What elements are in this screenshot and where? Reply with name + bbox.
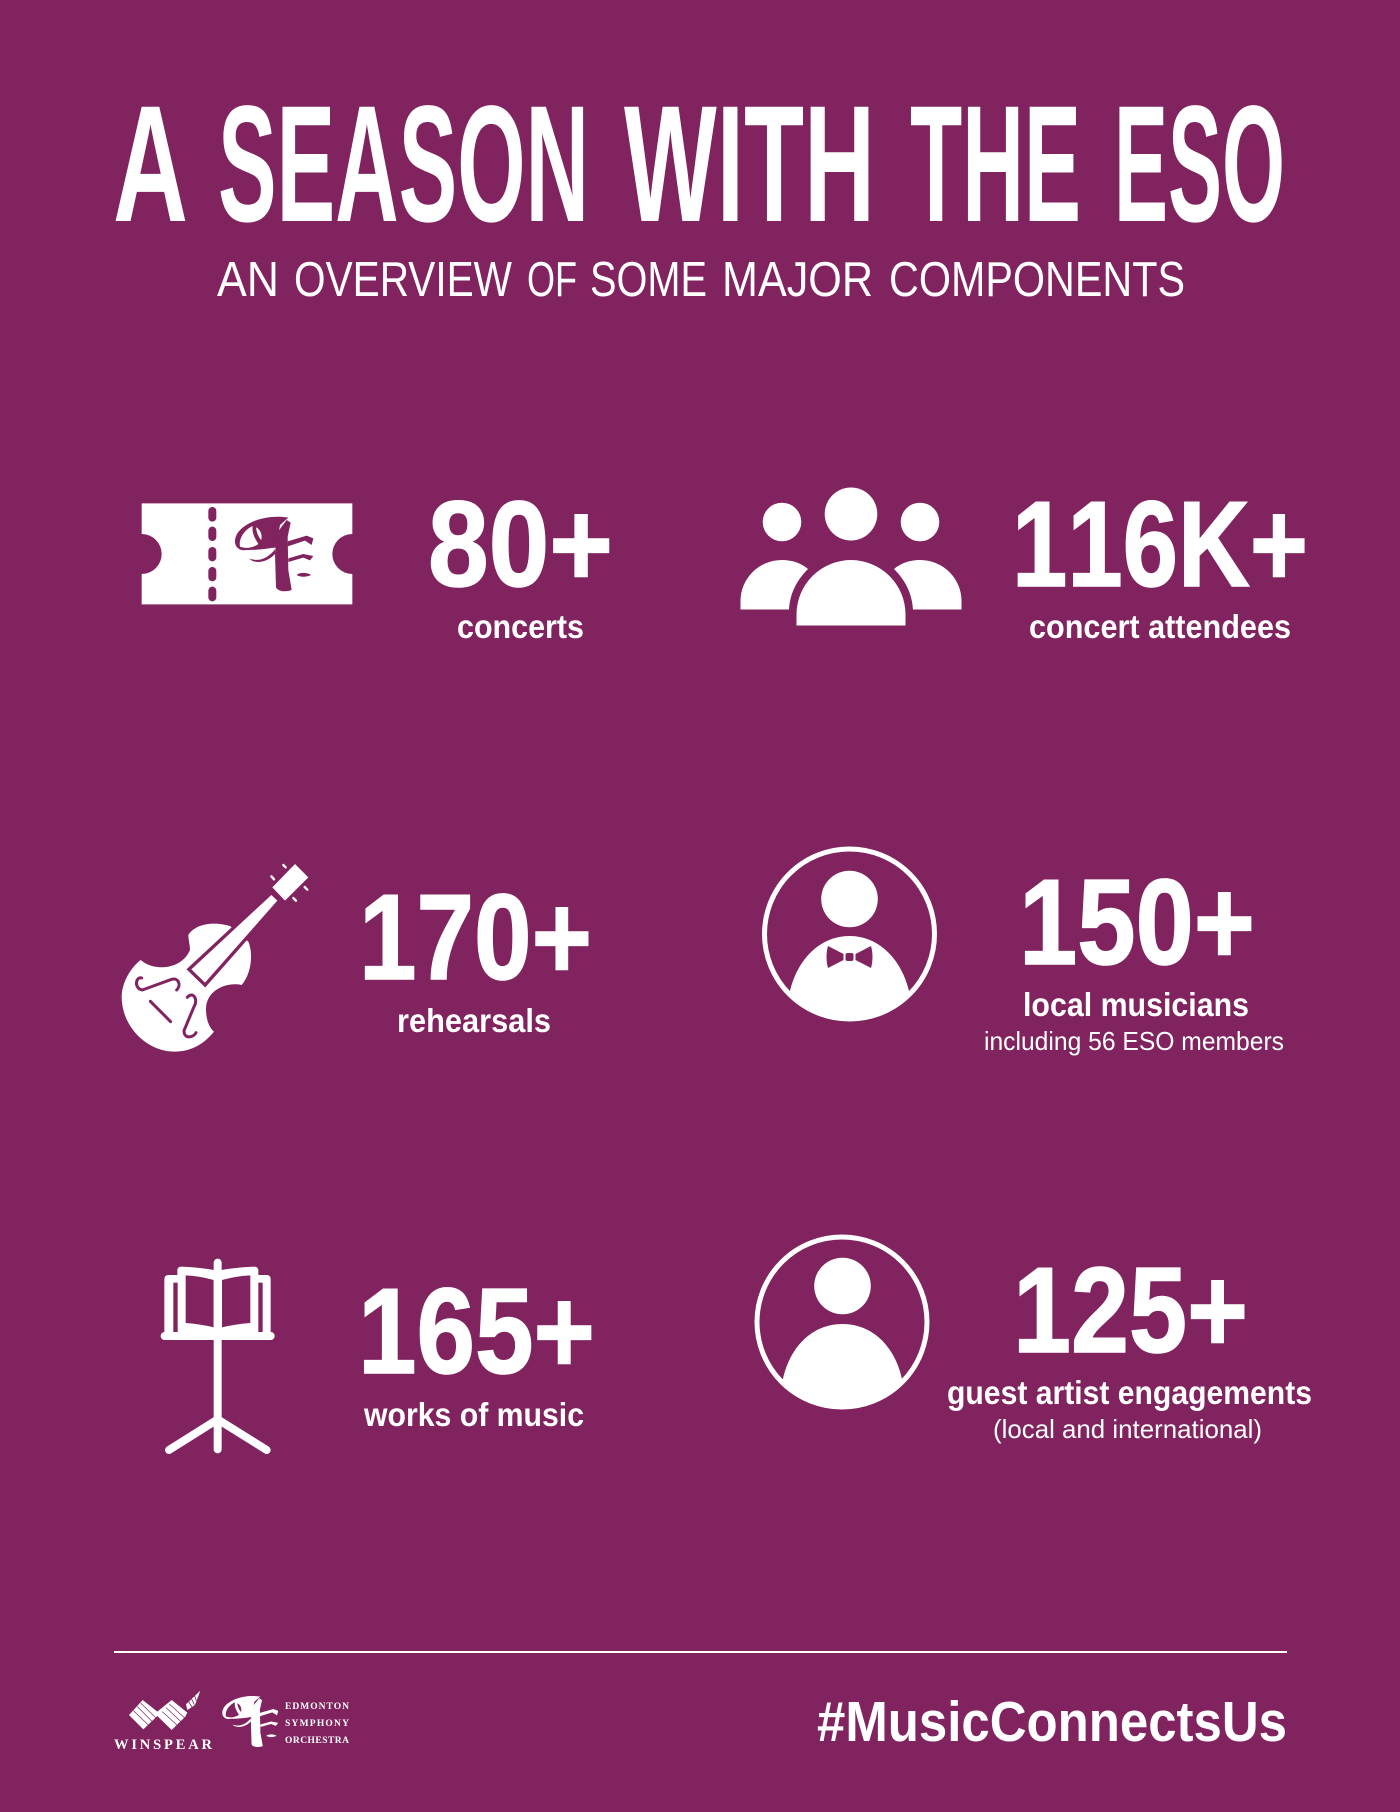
label: concert attendees: concert attendees	[1029, 608, 1291, 645]
footer text: orchestra name: SYMPHONY	[285, 1719, 349, 1729]
panel: concerts	[142, 476, 613, 645]
icon: musician with bow tie	[764, 849, 934, 1019]
footer text: orchestra name: EDMONTON	[285, 1702, 349, 1712]
title: SEASON	[218, 72, 589, 257]
title: WITH	[624, 72, 875, 257]
label: local musicians: local musicians	[1023, 986, 1249, 1023]
label: concerts: concerts	[457, 608, 584, 645]
stat: 165+: 165+	[358, 1263, 595, 1399]
sublabel: including 56 ESO members: including 56 ESO members	[984, 1026, 1284, 1056]
stat: 80+: 80+	[428, 476, 613, 612]
icon: violin	[122, 864, 308, 1052]
subtitle: OF	[527, 253, 577, 307]
icon: ESO mark	[222, 1696, 278, 1747]
panel: local musicians	[764, 849, 1284, 1056]
title: A	[113, 72, 188, 257]
footer logo: Winspear	[129, 1691, 200, 1730]
footer text: orchestra name: ORCHESTRA	[285, 1736, 349, 1746]
stat: 150+: 150+	[1019, 854, 1255, 990]
footer logo: Edmonton Symphony Orchestra	[222, 1696, 349, 1747]
panel: works of music	[164, 1263, 595, 1450]
subtitle: OVERVIEW	[294, 253, 513, 307]
hashtag: #MusicConnectsUs	[817, 1690, 1287, 1754]
sublabel: local and international: (local and international)	[993, 1414, 1262, 1444]
subtitle: SOME	[590, 253, 707, 307]
title: THE	[910, 72, 1081, 257]
subtitle: MAJOR	[722, 253, 873, 307]
footer text: WINSPEAR: WINSPEAR	[114, 1737, 213, 1753]
icon: guest artist	[757, 1237, 927, 1407]
subtitle: COMPONENTS	[889, 253, 1185, 307]
footer text: orchestra name	[285, 1702, 349, 1746]
stat: 116K+: 116K+	[1012, 476, 1308, 612]
label: works of music: works of music	[363, 1396, 584, 1433]
panel: rehearsals	[122, 864, 592, 1052]
panel: guest artist engagements	[757, 1237, 1312, 1444]
subtitle	[217, 253, 1185, 307]
label: rehearsals: rehearsals	[397, 1002, 551, 1039]
subtitle: AN	[217, 253, 279, 307]
title	[113, 72, 1285, 257]
icon: music stand	[164, 1263, 271, 1450]
icon: audience	[740, 488, 962, 626]
icon: ticket	[142, 503, 352, 604]
label: guest artist engagements: guest artist engagements	[947, 1374, 1312, 1411]
panel: concert attendees	[740, 476, 1308, 645]
stat: 125+: 125+	[1013, 1242, 1248, 1378]
stat: 170+: 170+	[359, 869, 592, 1005]
